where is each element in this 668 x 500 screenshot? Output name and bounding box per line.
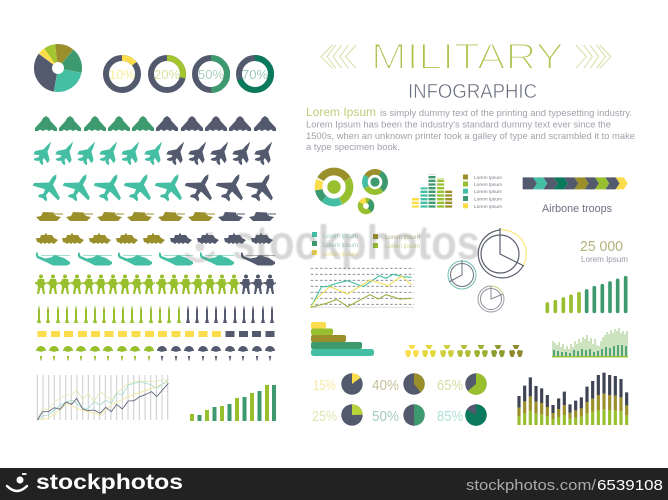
footer url: stockphotos.com/ (466, 477, 597, 494)
subtitle: INFOGRAPHIC: INFOGRAPHIC (408, 80, 537, 103)
stepped bar chart (311, 322, 374, 356)
footer logo text: stockphotos (36, 470, 183, 494)
outline pie icon: small (478, 286, 504, 312)
progress donut 20%: 20% (154, 67, 180, 82)
description text (306, 105, 635, 153)
legend: line chart: Lorem Ipsum (323, 233, 358, 240)
label: Airbone troops: Airbone troops (542, 203, 612, 215)
progress donut 10%: 10% (109, 67, 135, 82)
equalizer bar chart (415, 174, 449, 208)
stat label: Lorem Ipsum (581, 254, 628, 264)
pie row: 15%: 15% (313, 377, 336, 394)
progress donut 50%: 50% (198, 67, 224, 82)
pie row: 15% (313, 373, 363, 395)
legend: line chart: Lorem Ipsum (323, 251, 358, 258)
pie row: 25% (312, 404, 363, 426)
footer logo icon (7, 474, 27, 491)
outline pie icon: large (478, 228, 526, 278)
icon row: soldiers (35, 274, 276, 294)
icon: right chevrons (576, 45, 611, 68)
pie row: 65%: 65% (437, 377, 463, 394)
medium ring donut (361, 168, 389, 196)
outline pie icon: teal (448, 260, 476, 289)
donut cluster (312, 165, 389, 214)
legend: line chart: Lorem Ipsum (385, 243, 420, 250)
icon row: helicopters (36, 252, 275, 266)
icon row: stealth bombers (35, 116, 276, 131)
description text: a type specimen book. (306, 142, 400, 153)
small ring donut (358, 198, 374, 214)
legend: equalizer: Lorem Ipsum (474, 204, 502, 210)
icon row: ammo boxes (38, 331, 274, 337)
icon: left chevrons (321, 45, 356, 68)
legend: equalizer (463, 174, 502, 210)
pie row: 40% (372, 373, 425, 395)
legend: line chart: Lorem Ipsum (385, 234, 420, 241)
pie row: 85%: 85% (437, 408, 463, 425)
stat: 25 000: 25 000 (580, 239, 623, 255)
icon row: armoured vehicles (36, 234, 273, 244)
bar chart: rising green bars (190, 385, 276, 421)
progress donut 70%: 70% (242, 67, 268, 82)
description text: Lorem Ipsum (306, 105, 376, 119)
footer image id: 6539108 (597, 477, 663, 494)
legend: equalizer: Lorem Ipsum (474, 189, 502, 195)
line chart with vertical grid (37, 375, 168, 420)
title: MILITARY: MILITARY (371, 35, 564, 77)
stacked bar chart (519, 373, 627, 425)
icon row: tanks (36, 212, 276, 221)
icon row: parachutes (36, 346, 275, 360)
watermark: stockphotos (232, 217, 480, 270)
icon row: missiles (37, 305, 274, 323)
progress donut 70% (239, 58, 271, 90)
icon row: fighter jets (31, 137, 279, 167)
pie chart: multicolour segments (37, 47, 79, 89)
legend: line chart (312, 232, 420, 258)
line chart with dashed grid (311, 268, 414, 307)
pie row: 65% (437, 373, 487, 395)
missile-shaped bar chart (547, 278, 626, 311)
icon row: radiation signs (405, 345, 523, 357)
pie row: 25%: 25% (312, 408, 337, 425)
footer bar (0, 468, 668, 500)
legend: equalizer: Lorem Ipsum (474, 196, 502, 202)
pie row: 40%: 40% (372, 377, 399, 394)
progress donut 50% (195, 58, 227, 90)
progress donut 20% (151, 58, 183, 90)
pie row: 50% (372, 404, 425, 426)
pie row: 85% (437, 404, 487, 426)
pie row: 50%: 50% (372, 408, 399, 425)
progress donut 10% (106, 58, 138, 90)
chevron progress bar (523, 177, 628, 189)
legend: equalizer: Lorem Ipsum (474, 182, 502, 188)
description text: is simply dummy text of the printing and typesetting industry. (380, 108, 632, 119)
description text: 1500s, when an unknown printer took a galley of type and scrambled it to make (306, 131, 635, 142)
icon row: airliners (29, 167, 282, 207)
large ring donut (312, 165, 356, 209)
area bars chart (552, 328, 628, 357)
legend: equalizer: Lorem Ipsum (474, 175, 502, 181)
description text: Lorem Ipsum has been the industry's standard dummy text ever since the (306, 120, 611, 130)
legend: line chart: Lorem Ipsum (323, 242, 358, 249)
